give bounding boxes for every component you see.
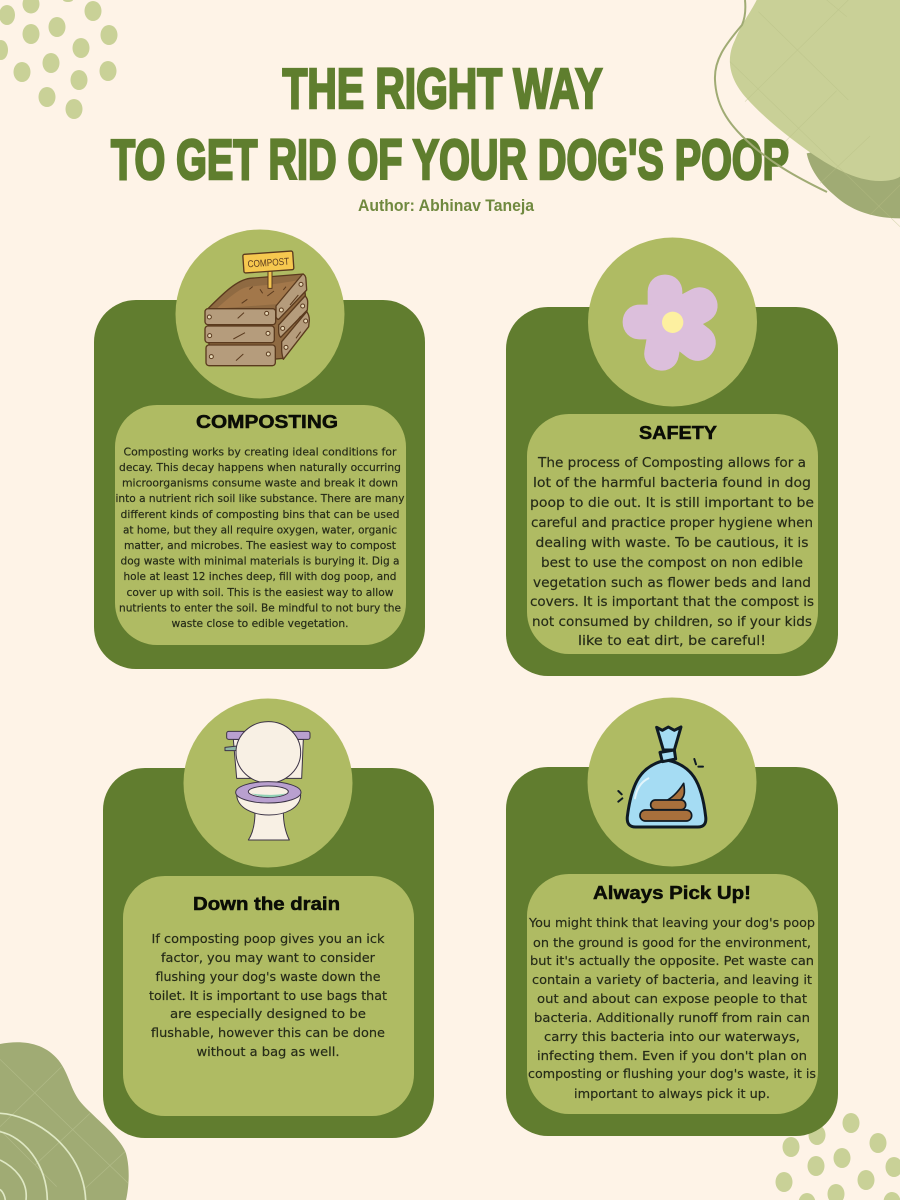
composting body text: hole at least 12 inches deep, fill with dog poop, and <box>124 571 396 583</box>
composting body text: matter, and microbes. The easiest way to compost <box>124 540 396 552</box>
composting body text: nutrients to enter the soil. Be mindful to not bury the <box>119 602 401 614</box>
safety body text: dealing with waste. To be cautious, it is <box>536 536 809 551</box>
safety body text: vegetation such as flower beds and land <box>533 576 811 591</box>
safety text card <box>527 414 818 654</box>
panel: composting <box>94 230 425 669</box>
safety body text: careful and practice proper hygiene when <box>531 516 813 531</box>
composting panel background <box>94 300 425 669</box>
pick up panel background <box>506 767 838 1136</box>
pick up body text: bacteria. Additionally runoff from rain can <box>534 1010 810 1025</box>
safety body text <box>530 456 814 649</box>
safety heading: SAFETY <box>639 423 717 443</box>
safety body text: best to use the compost on non edible <box>541 556 803 571</box>
icon: compost bin: COMPOST <box>247 257 290 270</box>
icon: poop bag <box>618 727 706 827</box>
decoration: bottom-right dots <box>776 1113 900 1200</box>
pick up body text: carry this bacteria into our waterways, <box>544 1029 800 1044</box>
composting text card <box>115 405 406 645</box>
safety body text: lot of the harmful bacteria found in dog <box>533 476 811 491</box>
safety body text: covers. It is important that the compost is <box>530 595 814 610</box>
icon: flower <box>623 275 724 373</box>
safety panel background <box>506 307 838 676</box>
drain heading: Down the drain <box>193 894 340 914</box>
safety body text: poop to die out. It is still important to be <box>530 496 814 511</box>
drain body text: factor, you may want to consider <box>161 950 376 965</box>
composting body text: waste close to edible vegetation. <box>172 618 348 630</box>
pick up icon circle <box>588 698 756 866</box>
drain panel background <box>103 768 434 1138</box>
pick up heading: Always Pick Up! <box>593 883 751 903</box>
composting body text: different kinds of composting bins that can be used <box>120 509 400 521</box>
safety body text: not consumed by children, so if your kids <box>532 615 812 630</box>
safety icon circle <box>588 238 757 406</box>
decoration: bottom-left blob <box>0 1042 129 1200</box>
drain body text: without a bag as well. <box>196 1044 340 1059</box>
pick up body text: infecting them. Even if you don't plan on <box>537 1048 807 1063</box>
safety body text: The process of Composting allows for a <box>537 456 806 471</box>
panel: down the drain <box>103 698 434 1138</box>
pick up body text: composting or flushing your dog's waste, it is <box>528 1066 816 1081</box>
drain body text: If composting poop gives you an ick <box>152 931 385 946</box>
decoration: top-right outline curve <box>715 0 827 192</box>
icon: compost bin <box>205 251 309 366</box>
drain icon circle <box>184 698 352 868</box>
composting icon circle <box>176 230 344 398</box>
composting body text: Composting works by creating ideal conditions for <box>124 446 397 458</box>
pick up body text: on the ground is good for the environment, <box>533 935 811 950</box>
decoration: top-right blobs <box>730 0 900 227</box>
composting body text: microorganisms consume waste and break it down <box>122 478 398 490</box>
composting body text: dog waste with minimal materials is burying it. Dig a <box>120 556 400 568</box>
drain body text: are especially designed to be <box>170 1006 366 1021</box>
composting body text <box>116 446 404 630</box>
panel: always pick up <box>506 698 838 1136</box>
decoration: top-left dots <box>0 0 118 119</box>
composting body text: decay. This decay happens when naturally occurring <box>119 462 401 474</box>
pick up body text: but it's actually the opposite. Pet waste can <box>530 953 814 968</box>
drain text card <box>123 876 414 1116</box>
pick up body text: important to always pick it up. <box>574 1086 770 1101</box>
composting body text: cover up with soil. This is the easiest way to allow <box>126 587 394 599</box>
drain body text: flushing your dog's waste down the <box>156 969 381 984</box>
drain body text: flushable, however this can be done <box>151 1025 385 1040</box>
pick up body text: out and about can expose people to that <box>537 991 807 1006</box>
pick up body text: You might think that leaving your dog's poop <box>528 915 815 930</box>
composting body text: at home, but they all require oxygen, water, organic <box>123 524 397 536</box>
title: THE RIGHT WAY <box>282 57 602 121</box>
pick up body text: contain a variety of bacteria, and leaving it <box>532 972 812 987</box>
icon: toilet <box>225 722 310 840</box>
safety body text: like to eat dirt, be careful! <box>578 634 766 649</box>
author: Author: Abhinav Taneja <box>358 196 535 215</box>
pick up body text <box>528 915 816 1101</box>
composting heading: COMPOSTING <box>196 412 338 432</box>
drain body text: toilet. It is important to use bags that <box>149 988 387 1003</box>
title <box>111 57 789 192</box>
panel: safety <box>506 238 838 676</box>
composting body text: into a nutrient rich soil like substance. There are many <box>116 493 404 505</box>
pick up text card <box>527 874 818 1114</box>
drain body text <box>149 931 387 1059</box>
